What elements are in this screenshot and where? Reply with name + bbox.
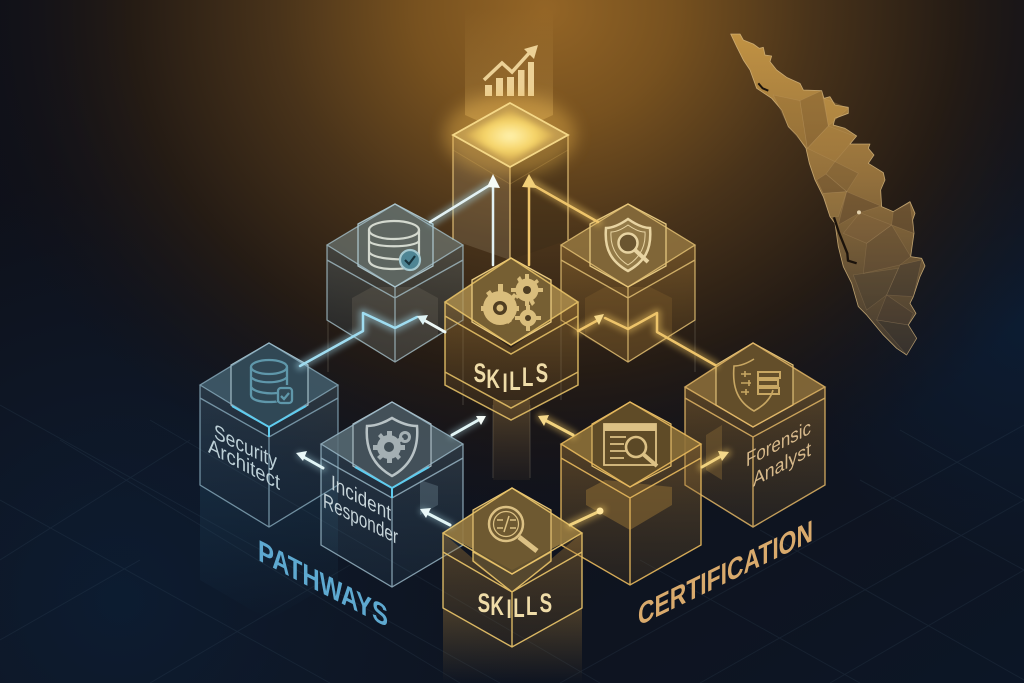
label: forensic analyst: Forensic (746, 415, 811, 472)
label: incident responder: Responder (323, 488, 398, 549)
top light beam (465, 8, 553, 135)
label: incident responder: Incident (331, 470, 392, 526)
icon: shield with magnifier (606, 219, 650, 271)
map: kerala low-poly (731, 34, 925, 355)
arrows: blue and white connections (296, 174, 500, 525)
cube: shield search (561, 204, 695, 362)
heading: certification: CERTIFICATION (638, 513, 813, 633)
floor grid (0, 405, 1024, 683)
map facets (773, 91, 922, 355)
cube: bottom skills (443, 488, 582, 683)
tower: top column (444, 95, 576, 260)
icon: shield with data (734, 359, 780, 411)
label: forensic analyst: Analyst (753, 437, 811, 492)
icon: rising chart (484, 45, 538, 96)
icon: database with check (369, 221, 420, 270)
map location dot (857, 210, 861, 214)
icon: shield gear (367, 418, 417, 476)
heading: pathways: PATHWAYS (258, 533, 388, 634)
cube: forensic analyst (685, 343, 825, 527)
cube: center skills (445, 258, 578, 480)
faint structural lines behind cubes (328, 320, 695, 478)
label: skills bottom: SKILLS (478, 588, 552, 624)
arrows: gold connections (522, 174, 729, 525)
icon: gears (481, 274, 543, 331)
cube: incident responder (321, 402, 463, 587)
cube: database verification (327, 204, 463, 362)
icon: window with magnifier (604, 424, 657, 466)
icon: magnifier (489, 507, 537, 551)
label: incident responder (323, 470, 398, 549)
label: forensic analyst (746, 415, 811, 492)
map backwaters (758, 83, 857, 263)
cube: log search (561, 402, 701, 585)
icon: database shield (251, 360, 292, 403)
label: security architect: Security (214, 419, 278, 474)
label: skills center: SKILLS (474, 358, 548, 398)
label: security architect (208, 419, 281, 495)
cube: security architect (200, 343, 338, 620)
label: security architect: Architect (208, 433, 281, 495)
